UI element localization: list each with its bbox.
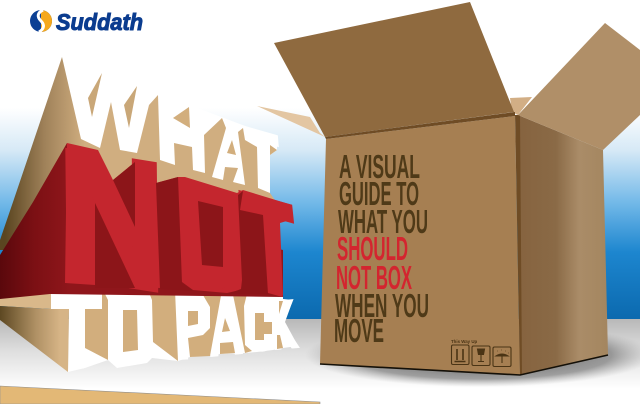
logo: Suddath: Suddath [56,9,143,35]
box text: guide message: WHEN YOU [335,287,429,324]
front panel of box [320,116,520,375]
box text: guide message: MOVE [334,312,384,349]
icon: fragile glass [472,346,490,366]
headline: TO PACK with tan extrusion: O [102,279,154,387]
headline: WHAT with tan extrusion: T [238,108,285,216]
box text: guide message: A VISUAL [339,148,420,185]
headline: WHAT with tan extrusion [0,33,285,250]
headline: TO PACK with tan extrusion [0,271,302,395]
icon: keep dry umbrella [493,347,511,366]
cardboard strip at bottom [0,386,320,404]
right side of box [518,115,608,375]
back flap [510,97,532,115]
headline: TO PACK with tan extrusion: A [206,282,245,376]
icon: this way up arrows [452,345,469,364]
handling icons: This Way Up [451,339,478,344]
headline: WHAT with tan extrusion: A [207,107,249,205]
box text: guide message: SHOULD [337,230,408,267]
headline: WHAT with tan extrusion: H [152,73,210,200]
headline: TO PACK with tan extrusion: T [50,271,102,395]
headline: TO PACK with tan extrusion: K [265,285,302,367]
corner edge [515,115,522,375]
cardboard box [257,2,640,375]
small left flap [257,106,325,137]
headline: TO PACK with tan extrusion: P [169,282,216,381]
top left flap [274,2,514,137]
box shadow on floor [305,323,640,387]
bottom edge [320,355,608,375]
flap crease [325,112,515,139]
box text: guide message: NOT BOX [336,259,412,296]
box text: guide message [334,148,429,349]
headline: WHAT with tan extrusion: W [61,33,162,195]
floor [0,319,640,389]
headline: NOT red with dark extrusion [0,111,306,338]
box text: guide message: GUIDE TO [339,175,419,212]
handling icons [451,339,511,366]
background: white sky to blue gradient [0,108,640,320]
headline: TO PACK with tan extrusion: C [244,288,274,369]
right flap [518,23,640,150]
headline: NOT red with dark extrusion: T [235,164,306,335]
box text: guide message: WHAT YOU [338,203,428,240]
headline: NOT red with dark extrusion: N [52,111,172,338]
headline: NOT red with dark extrusion: O [173,158,247,325]
